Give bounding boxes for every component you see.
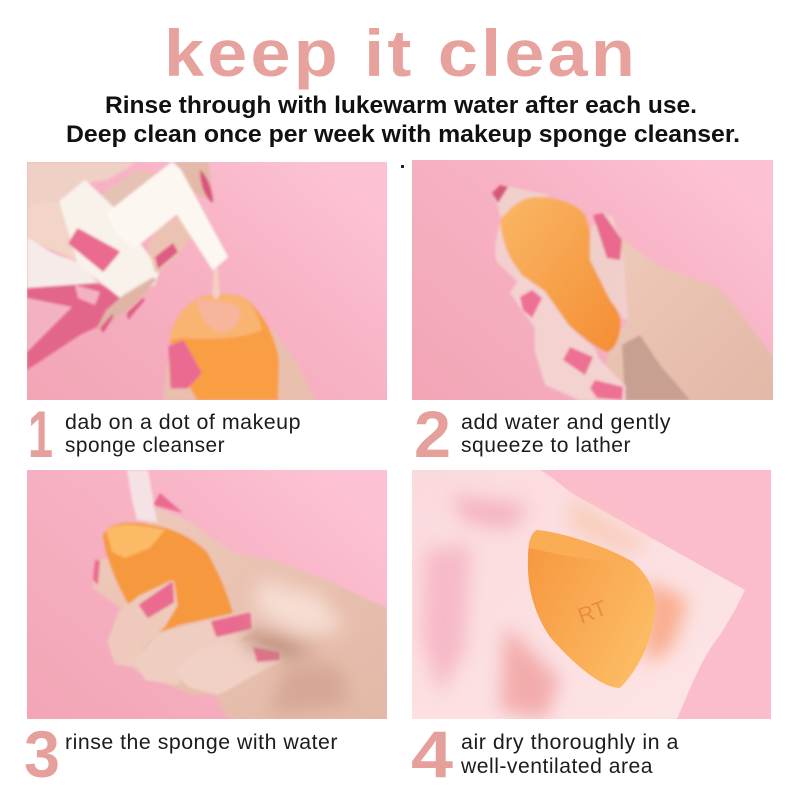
cleanser blob xyxy=(197,299,240,332)
foamy fingers xyxy=(513,278,623,400)
sponge flat face xyxy=(170,294,262,340)
step 1 caption xyxy=(28,397,301,471)
step 1 caption: 1 xyxy=(28,397,53,471)
towel stains xyxy=(422,495,688,719)
top nail xyxy=(492,185,508,203)
foam on sponge edge xyxy=(495,215,628,320)
step 3 caption: 3 xyxy=(24,717,60,791)
step 3 caption xyxy=(24,717,338,791)
lower hand xyxy=(163,330,315,400)
nails xyxy=(593,213,622,260)
step 1 caption: dab on a dot of makeup xyxy=(65,411,301,434)
sponge highlight xyxy=(106,525,165,558)
top finger xyxy=(492,185,550,217)
panel: step 2 photo xyxy=(412,160,773,400)
sponge xyxy=(170,294,279,400)
sponge thumbnail xyxy=(170,342,200,387)
panel: step 4 photo xyxy=(412,470,771,719)
title: keep it clean xyxy=(164,16,638,90)
soft hand shading xyxy=(245,580,350,715)
bottle highlight xyxy=(27,285,100,352)
subtitle xyxy=(66,92,740,148)
palm shadow xyxy=(622,335,690,400)
lower finger xyxy=(100,280,153,328)
sponge xyxy=(528,530,655,688)
nails xyxy=(140,583,173,617)
step 2 caption: squeeze to lather xyxy=(461,434,631,457)
hand xyxy=(600,237,773,400)
water stream xyxy=(127,470,157,522)
step 3 caption: rinse the sponge with water xyxy=(65,731,338,754)
sponge flat face xyxy=(529,530,633,562)
upper hand xyxy=(27,162,134,208)
middle finger xyxy=(137,613,252,682)
step 2 caption: add water and gently xyxy=(461,411,671,434)
thumb xyxy=(27,204,77,261)
top finger and nail xyxy=(176,162,212,200)
subtitle: Rinse through with lukewarm water after each use. xyxy=(105,92,697,119)
thumb foam xyxy=(588,212,620,314)
step 4 caption: well-ventilated area xyxy=(460,755,653,778)
step 4 caption: air dry thoroughly in a xyxy=(461,731,679,754)
step 1 caption: sponge cleanser xyxy=(65,434,225,457)
towel xyxy=(412,470,745,719)
middle finger xyxy=(150,220,188,270)
step 4 caption: 4 xyxy=(411,717,453,791)
step 4 caption xyxy=(411,717,679,791)
panel: step 3 photo xyxy=(27,470,387,719)
step 2 caption: 2 xyxy=(414,397,451,471)
index finger xyxy=(110,583,175,665)
clear bottle shoulder xyxy=(27,237,100,290)
stray dot xyxy=(401,165,404,168)
sponge xyxy=(103,523,233,632)
hand xyxy=(93,508,387,719)
thumbnail xyxy=(70,230,118,270)
pump collar xyxy=(62,183,157,297)
ring finger xyxy=(177,642,280,692)
pump nozzle xyxy=(108,163,227,269)
bottle xyxy=(27,283,130,370)
embossed logo: RT xyxy=(574,595,610,629)
sponge xyxy=(500,197,620,352)
panel: step 1 photo xyxy=(27,162,387,400)
subtitle: Deep clean once per week with makeup sponge cleanser. xyxy=(66,121,740,148)
step 2 caption xyxy=(414,397,671,471)
